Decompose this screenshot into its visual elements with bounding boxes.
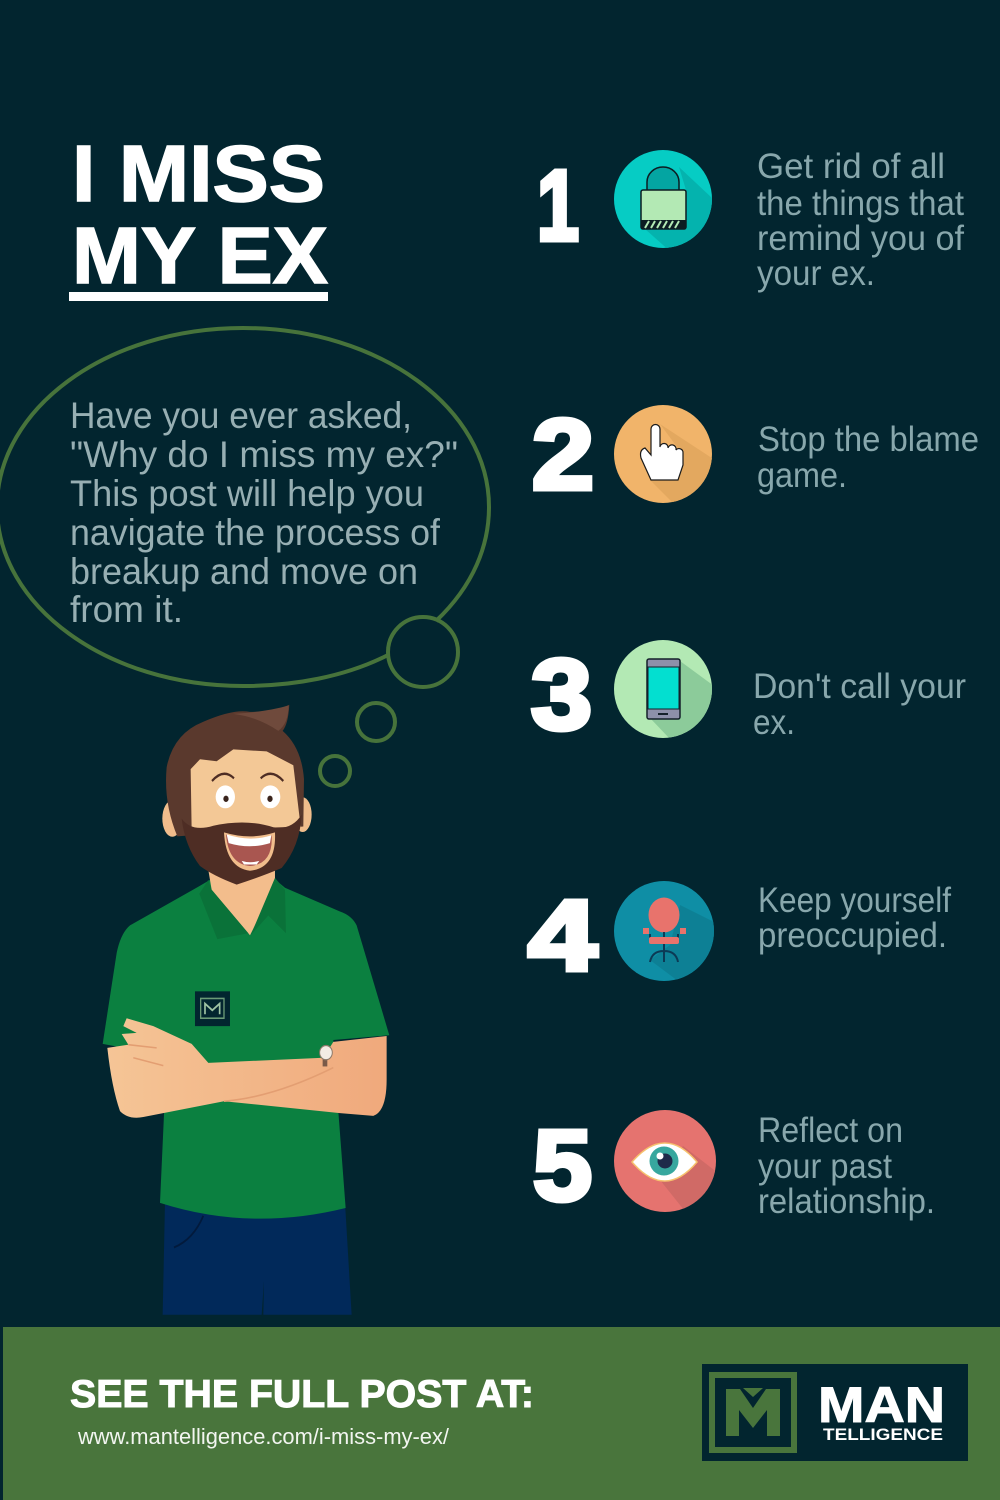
- title: I MISS: [72, 129, 325, 218]
- shirt: [103, 878, 389, 1219]
- icon: office chair: [614, 881, 714, 981]
- mouth: [224, 832, 275, 871]
- text 5: your past: [758, 1147, 892, 1186]
- step 4: [526, 881, 952, 981]
- step 3: [530, 640, 966, 738]
- text 3: Don't call your: [753, 667, 966, 706]
- number 4: 4: [528, 880, 597, 992]
- number 3: 3: [531, 639, 592, 751]
- text 1: [757, 147, 964, 293]
- title: [69, 129, 328, 301]
- intro text: "Why do I miss my ex?": [70, 434, 458, 475]
- text 5: Reflect on: [758, 1111, 903, 1150]
- logo: [702, 1364, 968, 1461]
- number 5: 5: [533, 1110, 592, 1222]
- text 2: [757, 420, 979, 495]
- shirt logo patch: [195, 991, 230, 1026]
- number 1: 1: [537, 150, 579, 262]
- text 4: preoccupied.: [758, 916, 947, 955]
- intro text: breakup and move on: [70, 551, 418, 592]
- footer url: www.mantelligence.com/i-miss-my-ex/: [77, 1424, 450, 1449]
- character: bearded man with crossed arms: [103, 705, 389, 1315]
- face: [191, 749, 301, 830]
- intro text: This post will help you: [70, 473, 424, 514]
- title: MY EX: [72, 211, 328, 300]
- neck: [208, 870, 275, 935]
- text 1: your ex.: [757, 254, 875, 293]
- thought bubble: [0, 328, 489, 786]
- intro text: Have you ever asked,: [70, 395, 412, 436]
- icon: pointing hand: [614, 405, 712, 503]
- text 3: ex.: [753, 703, 795, 742]
- ears: [162, 797, 312, 837]
- intro text: from it.: [70, 589, 183, 630]
- step 1: [537, 147, 964, 293]
- trouser pocket: [174, 1216, 203, 1247]
- intro text: navigate the process of: [70, 512, 441, 553]
- text 3: [753, 667, 966, 742]
- eyes: [212, 774, 283, 808]
- hair: [166, 705, 304, 836]
- footer heading: SEE THE FULL POST AT:: [70, 1373, 534, 1416]
- arm crease: [128, 1045, 333, 1101]
- crossed arms: [107, 1018, 387, 1118]
- icon: smartphone: [614, 640, 712, 738]
- beard: [182, 815, 302, 885]
- step 2: [533, 405, 978, 503]
- step 5: [533, 1110, 935, 1230]
- icon: eye: [614, 1110, 716, 1212]
- text 5: [758, 1111, 935, 1221]
- collar: [199, 878, 286, 939]
- logo: MAN: [818, 1377, 945, 1433]
- text 1: remind you of: [757, 219, 964, 258]
- wristwatch: [320, 1045, 332, 1066]
- trousers: [163, 1202, 352, 1315]
- icon: padlock: [614, 150, 712, 248]
- text 4: Keep yourself: [758, 881, 951, 920]
- number 2: 2: [532, 399, 594, 511]
- logo: TELLIGENCE: [823, 1425, 943, 1444]
- text 4: [758, 881, 951, 955]
- hair highlight: [233, 706, 289, 731]
- footer banner: [3, 1327, 1000, 1500]
- text 1: Get rid of all: [757, 147, 945, 186]
- text 2: game.: [757, 456, 847, 495]
- text 2: Stop the blame: [758, 420, 979, 459]
- intro text: [70, 395, 458, 630]
- text 5: relationship.: [758, 1182, 935, 1221]
- text 1: the things that: [757, 184, 964, 223]
